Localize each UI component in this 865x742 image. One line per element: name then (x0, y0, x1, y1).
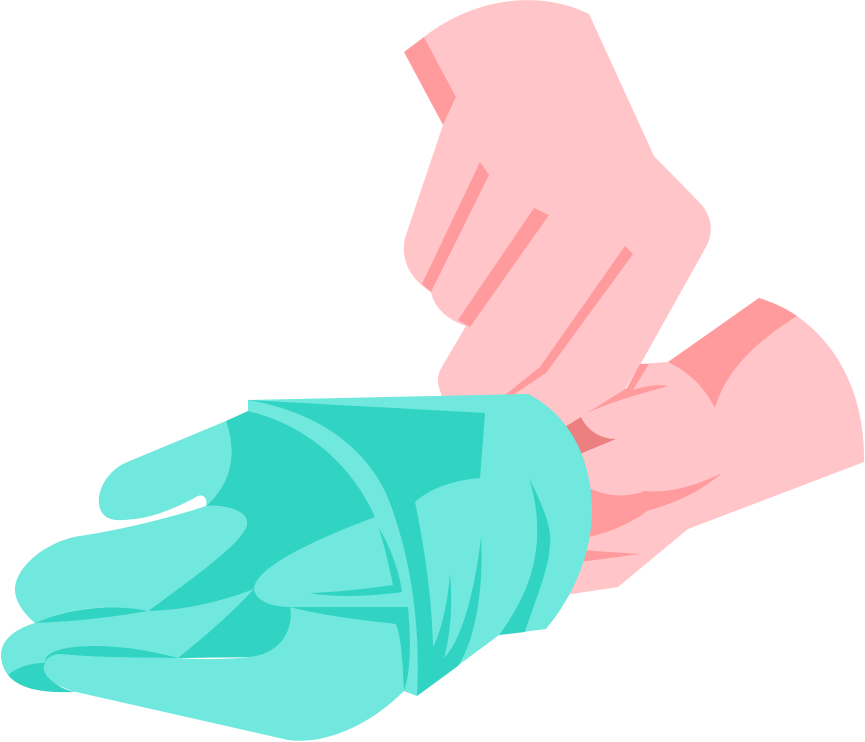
shadow: palm fold (585, 473, 722, 538)
glove finger: folded thumb (254, 517, 408, 607)
shadow: deep thumb fold (560, 417, 616, 456)
medical glove (1, 394, 592, 741)
finger separation 2 (458, 208, 549, 327)
gloved hand's forearm and wrist, pink (540, 298, 864, 595)
dark band under thumb (290, 607, 410, 691)
sleeve fold, right (499, 478, 550, 635)
shadow: thumb strip (587, 364, 668, 413)
shadow: wrist crease (668, 298, 797, 408)
dark wedge under fingers (178, 589, 291, 658)
finger separation 1 (422, 162, 489, 292)
glove finger: ring (1, 589, 254, 675)
finger separation 3 (505, 246, 633, 395)
glove finger: middle (15, 506, 247, 623)
shadow: lower wrist crease (580, 550, 640, 562)
inner glove, dark area on the right of the arc (248, 400, 485, 696)
shadow between middle and ring finger (35, 607, 148, 623)
shadow under ring finger tip (8, 663, 75, 692)
upper bare hand pulling the glove, pink (404, 0, 711, 430)
shadow between ring and little finger (45, 646, 178, 663)
inner glove, dark palm (148, 411, 375, 658)
glove finger: little and palm edge (44, 607, 404, 741)
cuff shadow (404, 37, 456, 125)
glove finger: index (99, 421, 231, 520)
glove sleeve, light base (248, 394, 592, 696)
fold detail in thumb (310, 528, 402, 596)
